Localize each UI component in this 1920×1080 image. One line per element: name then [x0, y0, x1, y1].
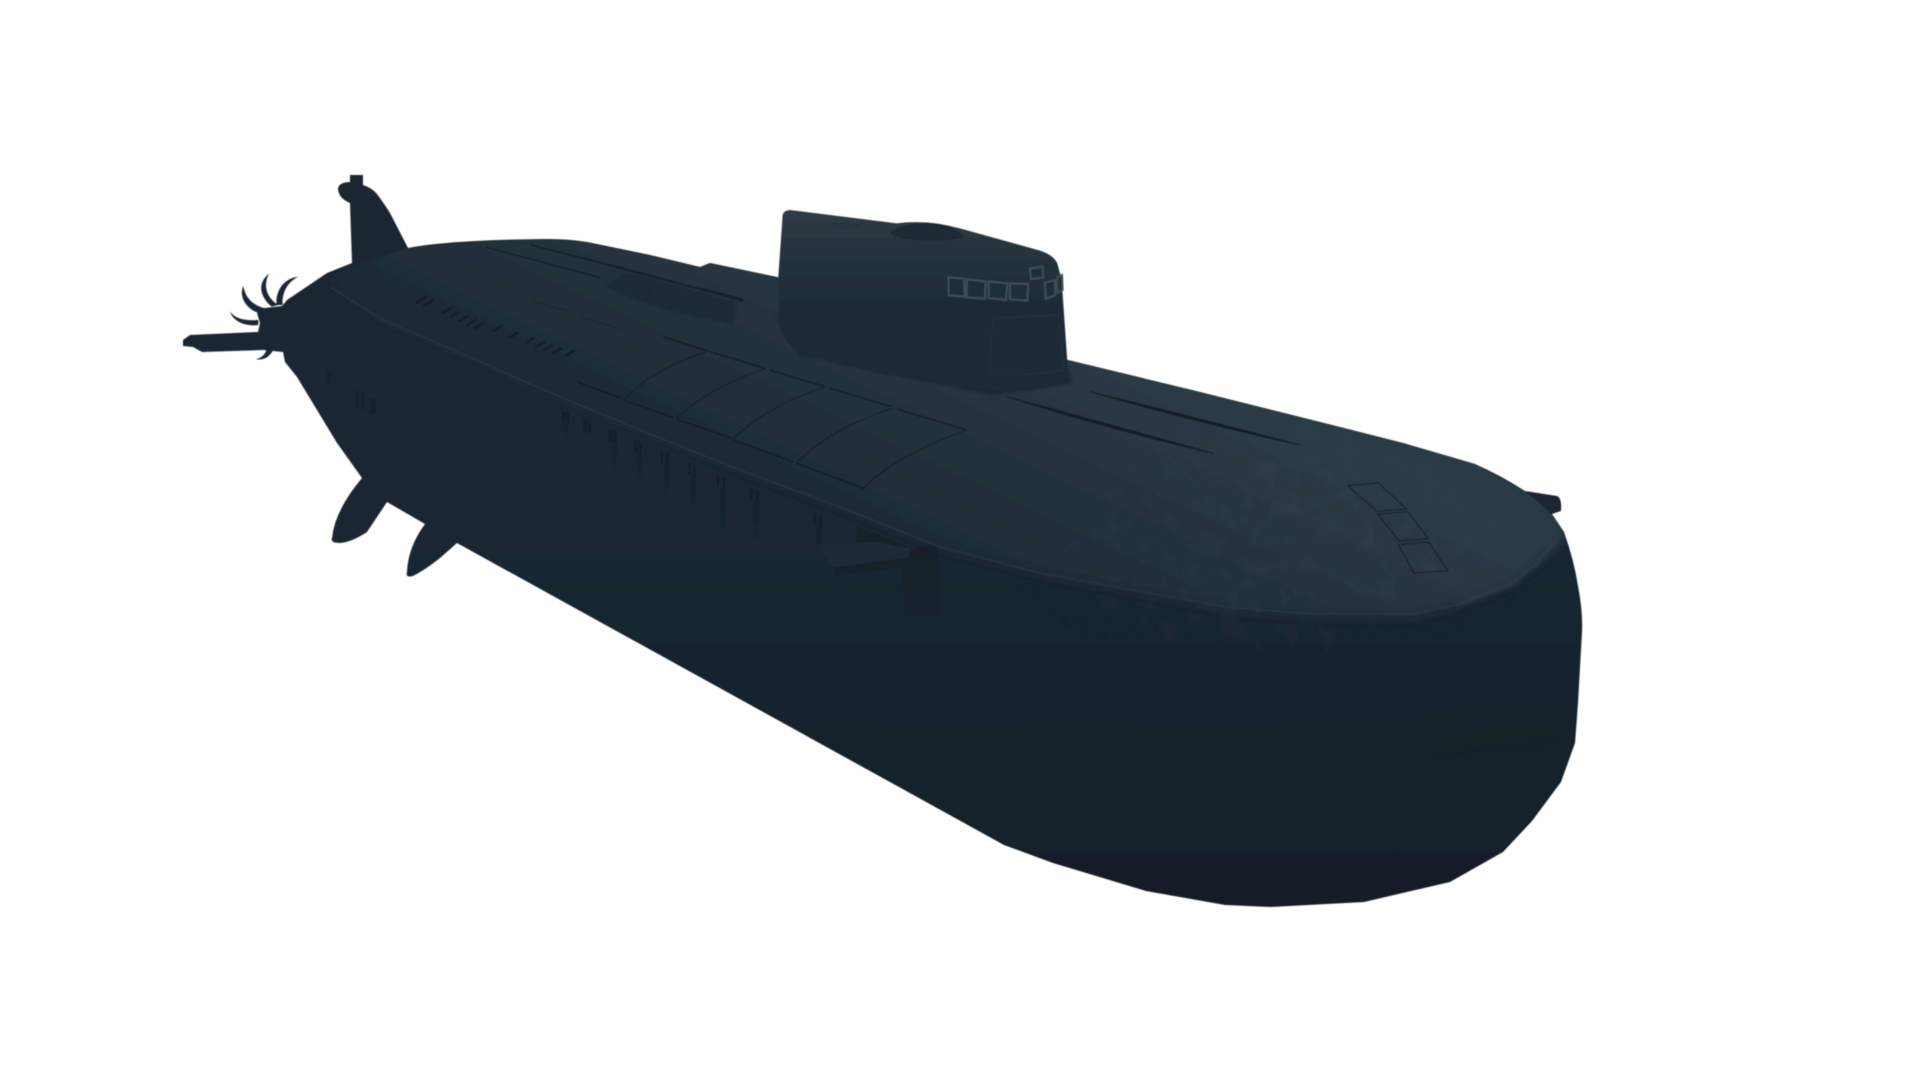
mottled surface texture on deck: [1256, 434, 1257, 435]
tower base shadow: [775, 313, 1072, 395]
stern highlight streak: [1457, 541, 1557, 605]
tower body: [778, 210, 1068, 391]
side vents with streaks: [562, 412, 822, 553]
stern hatches: [1348, 483, 1448, 573]
tower window frames: [948, 267, 1063, 301]
deck grooves near the stern fin: [487, 244, 743, 329]
bow-side vents: [327, 370, 640, 452]
deck grooves next to the tower base: [700, 288, 765, 368]
hydroplane: [817, 527, 942, 620]
tower hatch mark: [830, 223, 860, 229]
upper-deck vent slots: [416, 297, 575, 356]
periscope cap: [890, 223, 964, 241]
conning tower: [775, 210, 1072, 395]
forward panel on tower: [990, 315, 1063, 374]
top deck surface: [434, 239, 1565, 617]
missile hatch panels: [577, 337, 967, 488]
dark smear on stern side: [1403, 712, 1572, 760]
propeller blades: [230, 273, 298, 359]
deck grooves ahead of the tower: [1007, 392, 1300, 453]
submarine body: [183, 175, 1590, 907]
illustration: submarine: [182, 174, 1583, 908]
hull silhouette with rudder fin and propeller shaft: [183, 175, 1582, 907]
chine highlight line: [330, 287, 1557, 614]
